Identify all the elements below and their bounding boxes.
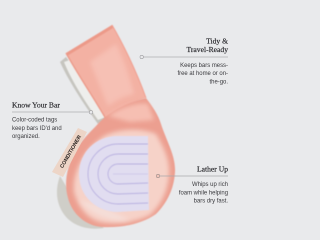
body text: free at home or on- <box>178 71 228 77</box>
grey pouch back <box>57 176 104 229</box>
body text: Color-coded tags <box>12 118 57 124</box>
body text <box>179 182 228 204</box>
bar ridges <box>88 144 148 204</box>
heading: Travel-Ready <box>187 45 228 54</box>
callout: Know Your Bar: keep bars ID'd and <box>12 126 62 132</box>
leader line <box>140 55 228 59</box>
background <box>0 0 240 240</box>
body text: Keeps bars mess- <box>180 63 228 69</box>
callout: Tidy & Travel-Ready <box>140 36 228 86</box>
body text: foam while helping <box>179 190 228 196</box>
callout: Know Your Bar: organized. <box>12 134 40 140</box>
heading: Lather Up <box>197 164 228 174</box>
grey inner strap <box>60 57 112 124</box>
heading: Tidy & <box>206 36 228 46</box>
heading: Know Your Bar <box>12 100 60 110</box>
heading <box>187 36 228 54</box>
body text: bars dry fast. <box>194 198 228 204</box>
body text <box>178 63 228 86</box>
tag: CONDITIONER <box>52 128 87 177</box>
tag: CONDITIONER: CONDITIONER <box>59 134 83 170</box>
leader line <box>156 174 228 178</box>
lavender bar <box>79 136 149 212</box>
pouch body <box>66 98 175 227</box>
body text: the-go. <box>210 80 228 86</box>
callout: Lather Up <box>156 164 228 204</box>
leader line <box>12 111 93 114</box>
mesh top strap <box>66 25 146 119</box>
illustration: mesh soap pouch <box>57 25 175 229</box>
callout: Know Your Bar <box>12 100 93 140</box>
body text: Whips up rich <box>192 182 228 188</box>
